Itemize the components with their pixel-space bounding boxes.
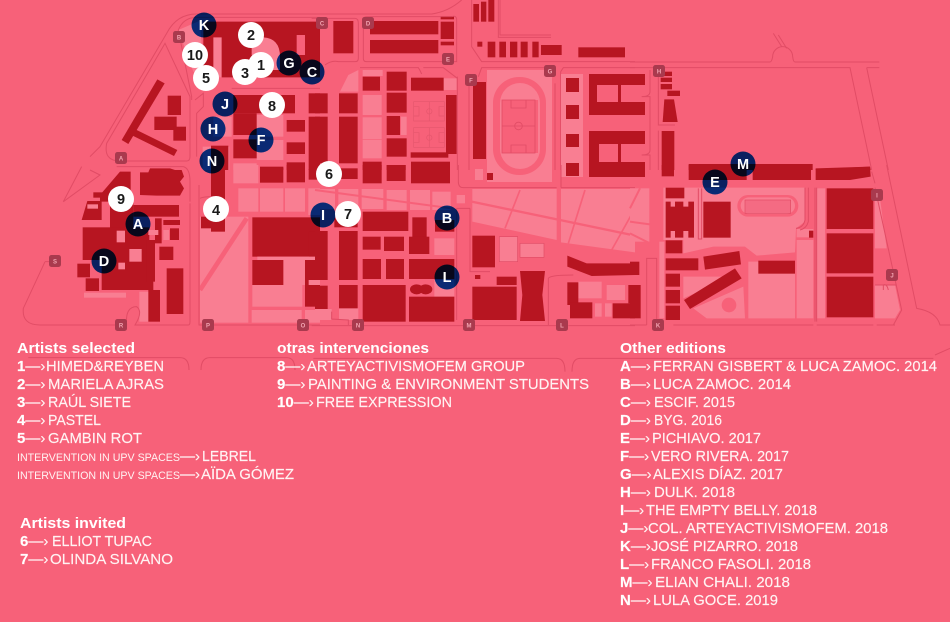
sign L: L [560, 324, 564, 330]
artist rows: —› [180, 448, 200, 465]
H-shaped buildings and squares [561, 74, 645, 177]
sign O [297, 319, 309, 331]
edition rows: ELIAN CHALI. 2018 [655, 574, 790, 591]
pin numbers: 8 [268, 99, 276, 115]
edition rows: JOSÉ PIZARRO. 2018 [651, 538, 798, 555]
map: south-west sector [23, 165, 320, 325]
athletics stadium [487, 70, 552, 182]
sign J: J [890, 274, 894, 280]
artist rows: GAMBIN ROT [48, 430, 142, 447]
edition rows: ALEXIS DÍAZ. 2017 [653, 466, 783, 483]
edition rows: H—› [620, 484, 651, 501]
edition rows: M—› [620, 574, 652, 591]
sign H [653, 65, 665, 77]
artist rows: 5—› [17, 430, 45, 447]
pin letters [99, 18, 749, 286]
pin numbers: 4 [212, 203, 220, 219]
pin numbers: 3 [241, 66, 249, 82]
pin letters: B [442, 211, 452, 227]
pin letters: N [207, 154, 217, 170]
artist rows: LEBREL [202, 448, 256, 465]
pin numbers: 5 [202, 71, 210, 87]
edition rows [620, 358, 937, 609]
pin numbers: 7 [344, 207, 352, 223]
campus map [23, 0, 950, 372]
pin letters: C [307, 65, 318, 81]
map: road curves below map [28, 348, 950, 372]
pin numbers: 2 [247, 28, 255, 44]
artist rows: —› [180, 466, 200, 483]
map: south-east sector [630, 165, 950, 325]
intervention rows: 10—› [277, 394, 314, 411]
edition rows: E—› [620, 430, 650, 447]
legend: artists selected [17, 340, 294, 483]
pin letters: G [283, 56, 295, 72]
invited rows: ELLIOT TUPAC [52, 533, 152, 550]
edition rows: PICHIAVO. 2017 [652, 430, 761, 447]
intervention rows: ARTEYACTIVISMOFEM GROUP [307, 358, 525, 375]
artist rows: 3—› [17, 394, 45, 411]
sign F: F [469, 78, 473, 84]
edition rows: F—› [620, 448, 649, 465]
intervention rows: FREE EXPRESSION [316, 394, 452, 411]
pin letters: H [208, 122, 218, 138]
edition rows: B—› [620, 376, 651, 393]
sign S: S [53, 260, 57, 266]
edition rows: I—› [620, 502, 644, 519]
long building beside stadium [473, 82, 493, 180]
heading: Artists invited [20, 515, 126, 532]
edition rows: THE EMPTY BELLY. 2018 [646, 502, 817, 519]
legend: otras intervenciones [277, 340, 589, 411]
edition rows: L—› [620, 556, 649, 573]
artist rows [17, 358, 294, 483]
legend: other editions [620, 340, 937, 609]
edition rows: LULA GOCE. 2019 [653, 592, 778, 609]
sign G [544, 65, 556, 77]
edition rows: FERRAN GISBERT & LUCA ZAMOC. 2014 [653, 358, 937, 375]
sign M: M [466, 324, 472, 330]
sign L [556, 319, 568, 331]
artist rows: INTERVENTION IN UPV SPACES [17, 470, 180, 482]
edition rows: VERO RIVERA. 2017 [651, 448, 789, 465]
intervention rows [277, 358, 589, 411]
heading: otras intervenciones [277, 340, 429, 357]
pin letters: J [221, 97, 229, 113]
artist rows: PASTEL [48, 412, 101, 429]
artist rows: 4—› [17, 412, 45, 429]
map: north-centre sector with sports fields [312, 0, 635, 170]
sign D: D [366, 22, 371, 28]
artist rows: MARIELA AJRAS [48, 376, 164, 393]
road sign labels [49, 17, 898, 331]
edition rows: DULK. 2018 [654, 484, 735, 501]
edition rows: LUCA ZAMOC. 2014 [653, 376, 791, 393]
pin letters: E [710, 175, 720, 191]
sign G: G [548, 70, 553, 76]
sign D [362, 17, 374, 29]
intervention rows: 8—› [277, 358, 305, 375]
edition rows: BYG. 2016 [654, 412, 722, 429]
pin numbers: 9 [117, 192, 125, 208]
pin numbers [117, 28, 352, 223]
map: south-centre sector [312, 165, 635, 326]
sign I [871, 189, 883, 201]
edition rows: FRANCO FASOLI. 2018 [651, 556, 811, 573]
pin letters: L [443, 270, 452, 286]
edition rows: C—› [620, 394, 651, 411]
sign K [652, 319, 664, 331]
artist rows: HIMED&REYBEN [46, 358, 164, 375]
sign S [49, 255, 61, 267]
artist rows: AÏDA GÓMEZ [201, 466, 294, 483]
pin letters: K [199, 18, 210, 34]
artist rows: 1—› [17, 358, 45, 375]
sign J [886, 269, 898, 281]
sign H: H [657, 70, 661, 76]
sign P: P [206, 324, 210, 330]
heading: Artists selected [17, 340, 135, 357]
edition rows: COL. ARTEYACTIVISMOFEM. 2018 [648, 520, 888, 537]
pin letters: I [321, 208, 325, 224]
pin letters: F [257, 133, 266, 149]
legend: artists invited [20, 515, 173, 568]
pin letters: M [737, 157, 749, 173]
edition rows: ESCIF. 2015 [654, 394, 735, 411]
sign B [173, 31, 185, 43]
sign C [316, 17, 328, 29]
pin numbers: 1 [257, 58, 265, 74]
intervention rows: 9—› [277, 376, 305, 393]
other-edition pins (navy) [92, 12, 756, 290]
invited rows: 7—› [20, 551, 48, 568]
sign N: N [356, 324, 360, 330]
intervention rows: PAINTING & ENVIRONMENT STUDENTS [308, 376, 589, 393]
sign R [115, 319, 127, 331]
sign E: E [446, 58, 450, 64]
sign K: K [656, 324, 661, 330]
map: north-east sector [630, 33, 888, 170]
sign E [442, 53, 454, 65]
sign R: R [119, 324, 124, 330]
sign F [465, 74, 477, 86]
sign I: I [876, 194, 878, 200]
pin numbers: 6 [325, 167, 333, 183]
edition rows: J—› [620, 520, 648, 537]
invited rows [20, 533, 173, 568]
pin letters: A [133, 217, 144, 233]
edition rows: D—› [620, 412, 651, 429]
artist rows: 2—› [17, 376, 45, 393]
selected-artist pins (white) [108, 22, 361, 227]
sign M [463, 319, 475, 331]
invited rows: 6—› [20, 533, 48, 550]
pin letters: D [99, 254, 109, 270]
sign B: B [177, 36, 182, 42]
invited rows: OLINDA SILVANO [50, 551, 173, 568]
edition rows: N—› [620, 592, 651, 609]
sign P [202, 319, 214, 331]
pin numbers: 10 [187, 48, 203, 64]
artist rows: INTERVENTION IN UPV SPACES [17, 452, 180, 464]
sign O: O [301, 324, 306, 330]
heading: Other editions [620, 340, 726, 357]
sign A: A [119, 156, 124, 162]
artist rows: RAÚL SIETE [48, 394, 131, 411]
map: north-west sector [90, 14, 320, 170]
sign A [115, 152, 127, 164]
edition rows: G—› [620, 466, 652, 483]
edition rows: K—› [620, 538, 651, 555]
sign N [352, 319, 364, 331]
edition rows: A—› [620, 358, 651, 375]
sign C: C [320, 22, 325, 28]
